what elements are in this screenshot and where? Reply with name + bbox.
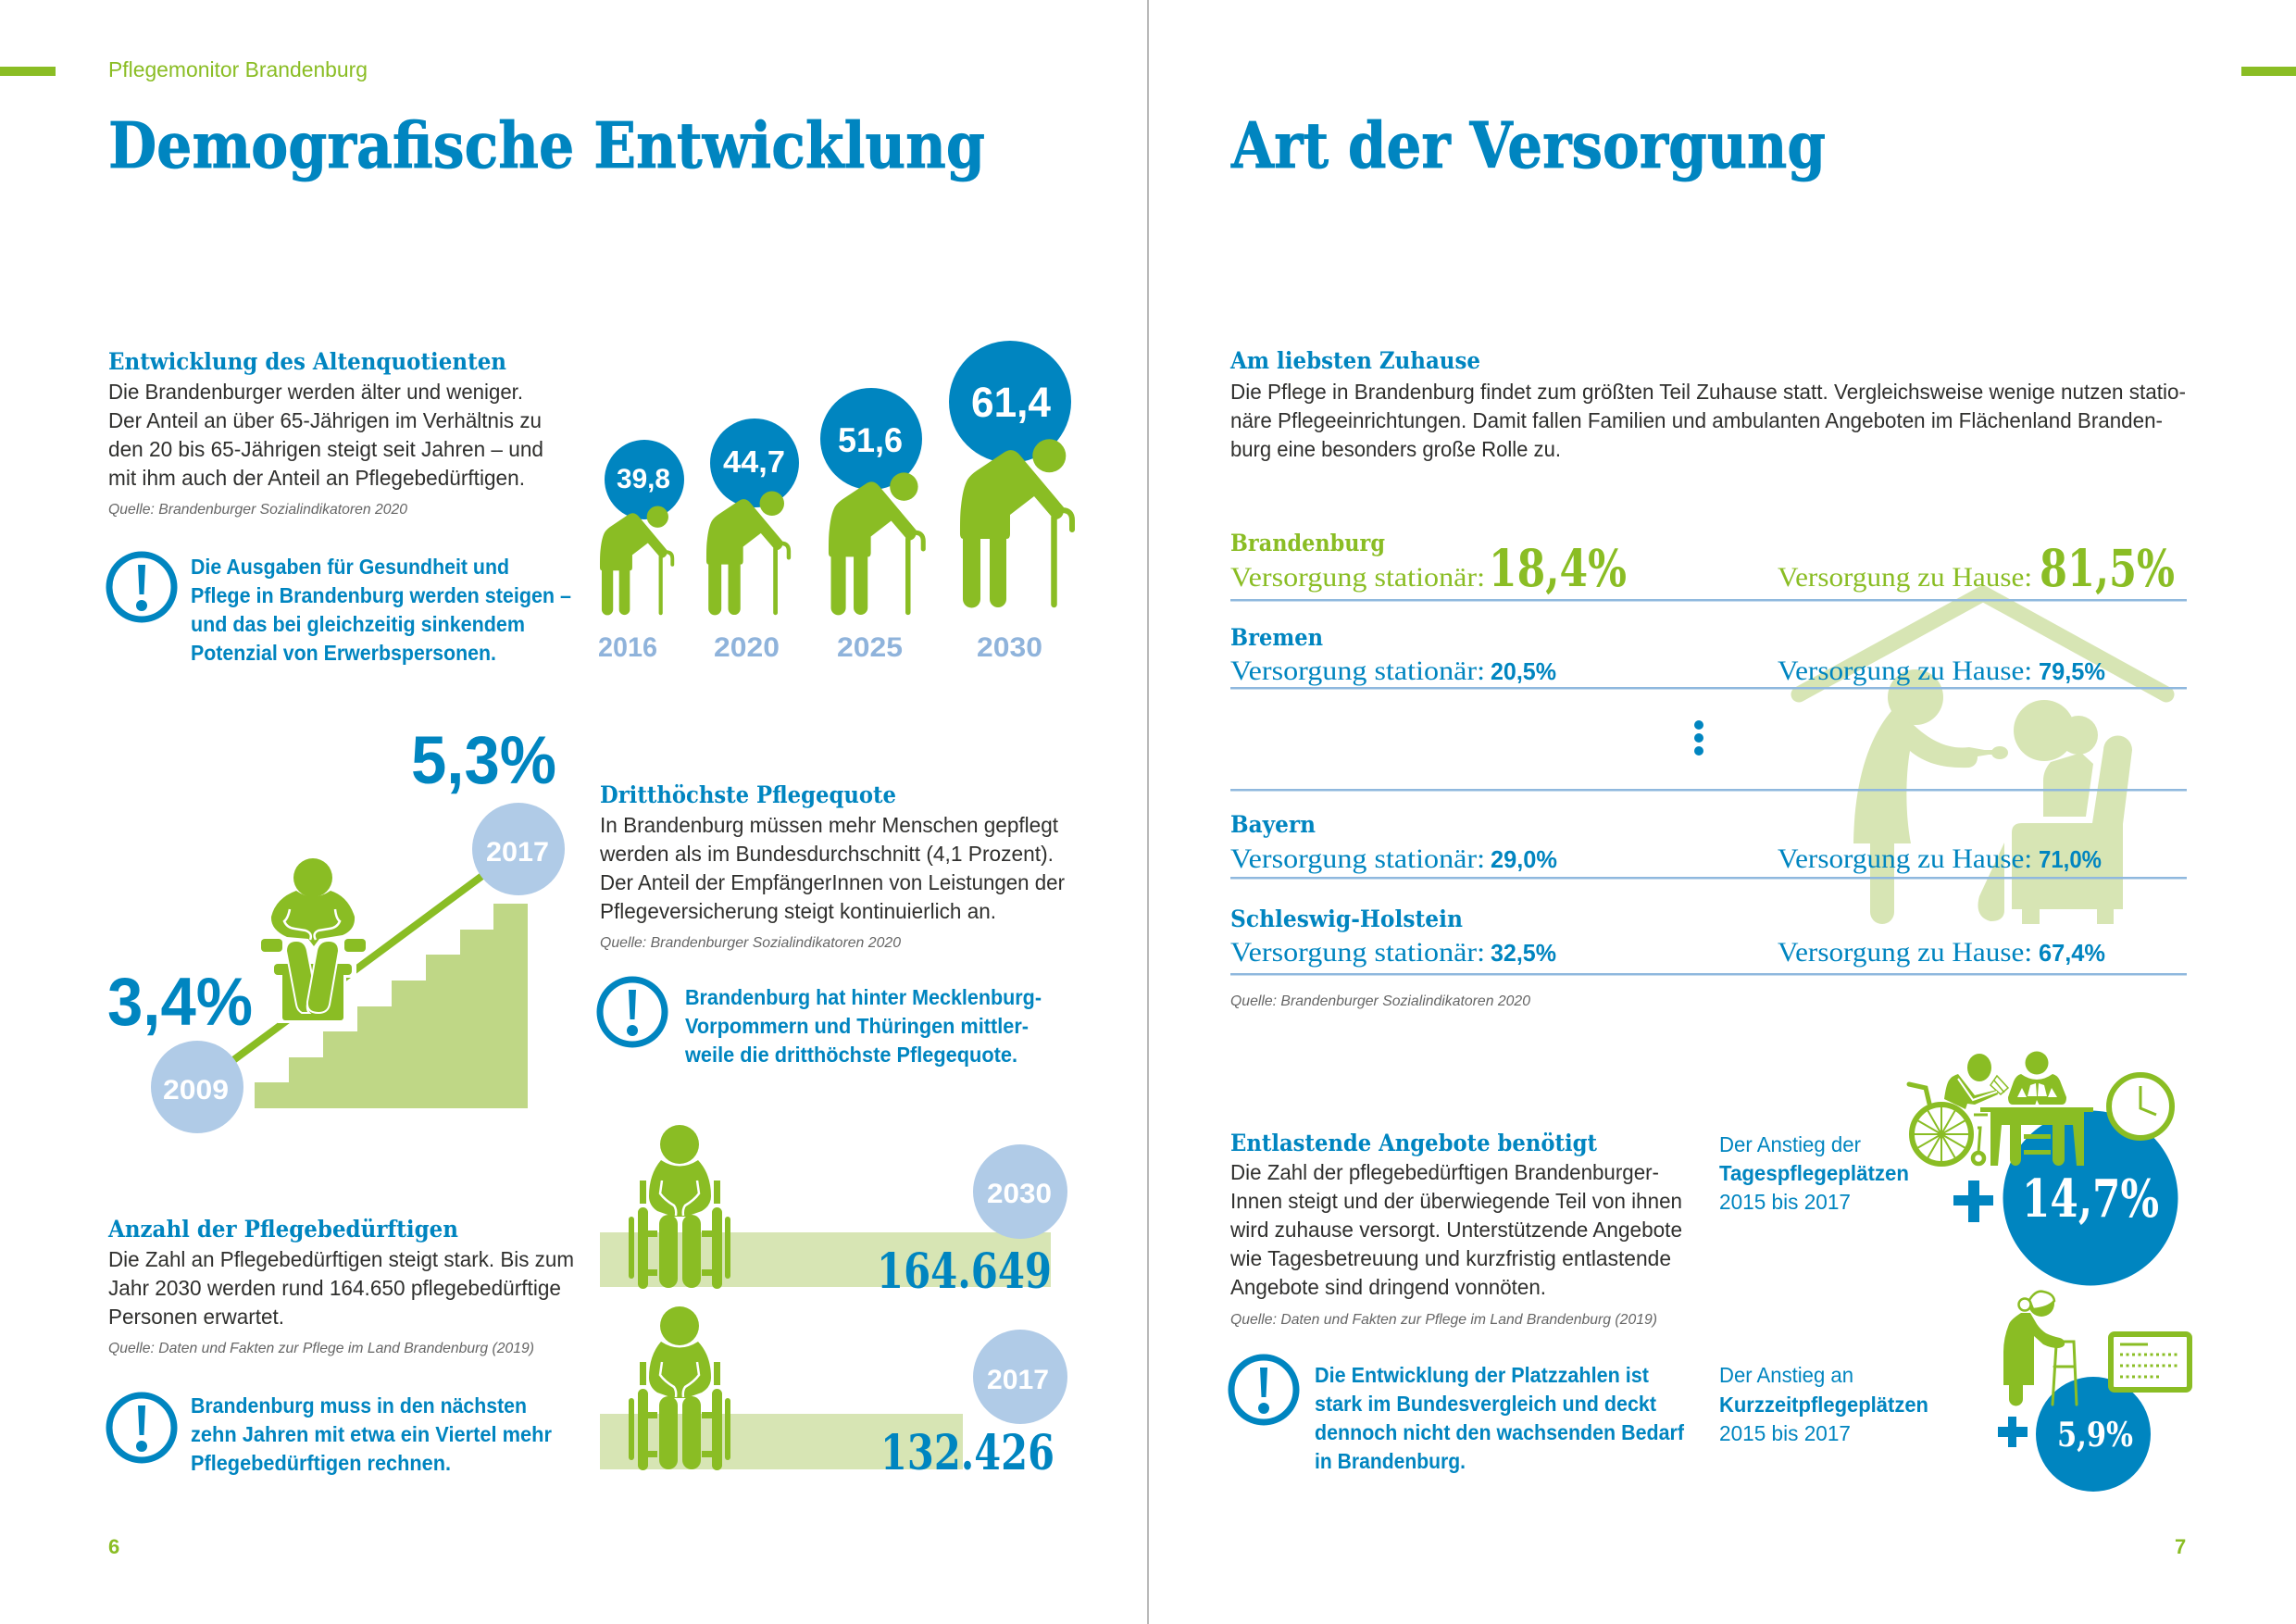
text block: Anzahl der Pflegebedürftigen: Quelle: Daten und Fakten zur Pflege im Land Brandenburg (2019)	[108, 1341, 534, 1356]
text block: Entwicklung des Altenquotienten: den 20 bis 65-Jährigen steigt seit Jahren – und	[108, 437, 543, 461]
row: Schleswig-Holstein	[1230, 906, 2105, 968]
text block: Anzahl der Pflegebedürftigen: Personen erwartet.	[108, 1305, 284, 1329]
chart: Altenquotient 2030: 61,4	[971, 379, 1051, 426]
chart: Pflegequote Treppe	[107, 723, 565, 1133]
value 3,4%: 3,4%	[107, 965, 253, 1040]
circle 2009: 2009	[163, 1075, 229, 1106]
icon: plus small	[1998, 1417, 2028, 1447]
callout: Ausgaben: Die Ausgaben für Gesundheit und	[191, 555, 509, 579]
callout: dritthöchste Pflegequote: Brandenburg hat hinter Mecklenburg-	[685, 985, 1042, 1009]
callout: Platzzahlen: stark im Bundesvergleich und deckt	[1315, 1392, 1656, 1416]
text block: Entlastende Angebote benötigt: Quelle: Daten und Fakten zur Pflege im Land Brandenburg (2019)	[1230, 1312, 1657, 1328]
row: Bremen: Versorgung stationär:	[1230, 656, 1485, 686]
text block: Anzahl der Pflegebedürftigen: Jahr 2030 werden rund 164.650 pflegebedürftige	[108, 1276, 561, 1300]
text block: Entwicklung des Altenquotienten: Entwicklung des Altenquotienten	[108, 348, 506, 375]
row: Brandenburg	[1230, 530, 2175, 598]
callout: dritthöchste Pflegequote	[600, 980, 1042, 1067]
text block: Entlastende Angebote benötigt: Angebote sind dringend vonnöten.	[1230, 1275, 1546, 1299]
text: Kurzzeitpflegeplätze: 2015 bis 2017	[1719, 1421, 1851, 1445]
callout: Ausgaben: und das bei gleichzeitig sinkendem	[191, 612, 525, 636]
icon: plan board	[2111, 1334, 2190, 1390]
text block: Entlastende Angebote benötigt	[1229, 1130, 1682, 1328]
table: Versorgung nach Ländern	[1230, 530, 2187, 976]
text: Kurzzeitpflegeplätze	[1719, 1363, 1928, 1445]
callout: dritthöchste Pflegequote: Vorpommern und Thüringen mittler-	[685, 1014, 1029, 1038]
text block: Dritthöchste Pflegequote: werden als im Bundesdurchschnitt (4,1 Prozent).	[599, 842, 1054, 866]
callout: Platzzahlen: in Brandenburg.	[1315, 1449, 1466, 1473]
text block: Dritthöchste Pflegequote: In Brandenburg müssen mehr Menschen gepflegt	[600, 813, 1059, 837]
bar chart: 2017	[600, 1306, 1067, 1481]
row: Schleswig-Holstein: Versorgung zu Hause:	[1778, 937, 2032, 968]
text: Kurzzeitpflegeplätze: Der Anstieg an	[1719, 1363, 1853, 1387]
row: Bremen: 20,5%	[1491, 657, 1556, 685]
callout: Ausgaben	[109, 555, 571, 665]
text block: Am liebsten Zuhause: burg eine besonders große Rolle zu.	[1230, 437, 1561, 461]
icon: wheelchair card game	[1909, 1052, 2093, 1166]
icon: clock	[2109, 1075, 2172, 1138]
icon: woman with walker	[2003, 1291, 2077, 1405]
chart: Altenquotient 2016	[598, 440, 684, 663]
text block: Am liebsten Zuhause: näre Pflegeeinrichtungen. Damit fallen Familien und ambulanten Angeboten im Flächenland Branden-	[1230, 408, 2163, 432]
value 5,3%: 5,3%	[411, 723, 556, 798]
circle 2017: 2017	[486, 837, 549, 868]
text block: Entlastende Angebote benötigt: wird zuhause versorgt. Unterstützende Angebote	[1229, 1218, 1682, 1242]
text block: Anzahl der Pflegebedürftigen	[107, 1216, 574, 1356]
text block: Dritthöchste Pflegequote: Pflegeversicherung steigt kontinuierlich an.	[600, 899, 996, 923]
text block: Entwicklung des Altenquotienten: Quelle: Brandenburger Sozialindikatoren 2020	[108, 502, 407, 518]
top mark right	[2241, 67, 2296, 76]
text block: Entlastende Angebote benötigt: Innen steigt und der überwiegende Teil von ihnen	[1230, 1189, 1682, 1213]
text block: Anzahl der Pflegebedürftigen: Anzahl der Pflegebedürftigen	[107, 1216, 458, 1243]
stat circle: 14,7%	[2003, 1111, 2177, 1285]
text block: Entlastende Angebote benötigt: wie Tagesbetreuung und kurzfristig entlastende	[1229, 1246, 1671, 1270]
text: Tagespflegeplätze: Tagespflegeplätzen	[1719, 1161, 1909, 1185]
bar chart: 2030: 164.649	[877, 1243, 1052, 1300]
text block: Am liebsten Zuhause: Die Pflege in Brandenburg findet zum größten Teil Zuhause statt. Vergleichsweise wenige nutzen statio-	[1230, 380, 2186, 404]
text block: Dritthöchste Pflegequote: Der Anteil der EmpfängerInnen von Leistungen der	[600, 870, 1065, 894]
row: Bayern: Versorgung zu Hause:	[1778, 843, 2032, 874]
text block: Anzahl der Pflegebedürftigen: Die Zahl an Pflegebedürftigen steigt stark. Bis zum	[108, 1247, 574, 1271]
row: Bremen: 79,5%	[2039, 657, 2105, 685]
callout: dritthöchste Pflegequote: weile die dritthöchste Pflegequote.	[684, 1043, 1017, 1067]
text block: Dritthöchste Pflegequote	[599, 781, 1065, 951]
chart: Altenquotient 2025: 2025	[837, 632, 903, 663]
circle 2009	[151, 1041, 243, 1133]
row: Bayern: Versorgung stationär:	[1230, 843, 1485, 874]
row: Brandenburg: 81,5%	[2040, 538, 2175, 598]
title: Demografische Entwicklung: Demografische Entwicklung	[108, 109, 985, 183]
title: Art der Versorgung: Art der Versorgung	[1230, 109, 1826, 183]
row: Bayern	[1230, 811, 2102, 874]
row: Brandenburg: Versorgung zu Hause:	[1778, 562, 2032, 593]
text block: Entlastende Angebote benötigt: Die Zahl der pflegebedürftigen Brandenburger-	[1230, 1160, 1659, 1184]
text: Tagespflegeplätze: 2015 bis 2017	[1719, 1190, 1851, 1214]
row: Bayern: 29,0%	[1491, 845, 1557, 873]
text block: Dritthöchste Pflegequote: Quelle: Brandenburger Sozialindikatoren 2020	[600, 935, 901, 951]
chart: Altenquotient 2016: 39,8	[617, 464, 670, 494]
stat circle: 14,7%: 14,7%	[2022, 1168, 2159, 1230]
stat circle: 5,9%: 5,9%	[2057, 1416, 2133, 1455]
bar chart: 2017: 132.426	[880, 1425, 1054, 1481]
row: Brandenburg: Brandenburg	[1230, 530, 1385, 556]
callout: Platzzahlen	[1231, 1357, 1684, 1473]
circle 2017	[472, 803, 565, 895]
chart: Altenquotient 2025: 51,6	[838, 421, 903, 459]
icon: ellipsis dots	[1694, 720, 1703, 756]
callout: Viertel mehr	[109, 1393, 552, 1475]
row: Brandenburg: 18,4%	[1489, 538, 1627, 598]
text block: Dritthöchste Pflegequote: Dritthöchste Pflegequote	[600, 781, 896, 808]
chart: Altenquotient 2030: 2030	[977, 632, 1042, 663]
text: Tagespflegeplätze: Der Anstieg der	[1719, 1132, 1861, 1156]
bar chart: 2030	[600, 1125, 1067, 1300]
row: Bayern: Bayern	[1230, 811, 1316, 838]
row: Schleswig-Holstein: 67,4%	[2039, 939, 2105, 967]
callout: Viertel mehr: Pflegebedürftigen rechnen.	[191, 1451, 451, 1475]
running header: Pflegemonitor Brandenburg	[108, 57, 368, 81]
callout: Ausgaben: Pflege in Brandenburg werden steigen –	[191, 583, 571, 607]
bar chart: 2030: 2030	[987, 1179, 1052, 1209]
chart: Altenquotient 2020: 2020	[714, 632, 780, 663]
text block: Entwicklung des Altenquotienten: Der Anteil an über 65-Jährigen im Verhältnis zu	[108, 408, 542, 432]
callout: Platzzahlen: Die Entwicklung der Platzzahlen ist	[1315, 1363, 1649, 1387]
stat circle: 5,9%	[2036, 1377, 2151, 1492]
callout: Ausgaben: Potenzial von Erwerbspersonen.	[191, 641, 496, 665]
row: Bremen	[1230, 624, 2105, 686]
callout: Viertel mehr: Brandenburg muss in den nächsten	[191, 1393, 527, 1418]
text block: Entlastende Angebote benötigt: Entlastende Angebote benötigt	[1230, 1130, 1597, 1156]
page divider	[1147, 0, 1149, 1624]
text block: Entwicklung des Altenquotienten: mit ihm auch der Anteil an Pflegebedürftigen.	[108, 466, 525, 490]
icon: plus large	[1953, 1181, 1993, 1222]
callout: Viertel mehr: zehn Jahren mit etwa ein Viertel mehr	[191, 1422, 552, 1446]
row: Schleswig-Holstein: 32,5%	[1491, 939, 1556, 967]
text block: Entwicklung des Altenquotienten: Die Brandenburger werden älter und weniger.	[108, 380, 523, 404]
page number 6: 6	[108, 1535, 119, 1558]
source note: Quelle: Brandenburger Sozialindikatoren 2020	[1230, 993, 1530, 1009]
row: Bayern: 71,0%	[2039, 845, 2102, 873]
arrow: rising line	[197, 849, 518, 1087]
page number 7: 7	[2175, 1535, 2186, 1558]
chart: Altenquotient 2020	[706, 418, 799, 663]
top mark left	[0, 67, 56, 76]
chart: Altenquotient 2016: 2016	[598, 632, 657, 663]
text block: Entwicklung des Altenquotienten	[108, 348, 543, 518]
row: Schleswig-Holstein: Schleswig-Holstein	[1230, 906, 1463, 932]
text: Tagespflegeplätze	[1719, 1132, 1909, 1214]
icon: person on stairlift	[261, 858, 366, 1023]
row: Brandenburg: Versorgung stationär:	[1230, 562, 1485, 593]
text block: Am liebsten Zuhause	[1229, 347, 2186, 461]
stairs	[255, 904, 528, 1108]
text block: Am liebsten Zuhause: Am liebsten Zuhause	[1229, 347, 1480, 374]
chart: Altenquotient 2025	[820, 388, 923, 663]
row: Bremen: Versorgung zu Hause:	[1778, 656, 2032, 686]
callout: Platzzahlen: dennoch nicht den wachsenden Bedarf	[1315, 1420, 1684, 1444]
text: Kurzzeitpflegeplätze: Kurzzeitpflegeplätzen	[1719, 1393, 1928, 1417]
icon: care at home watermark	[1799, 593, 2166, 924]
chart: Altenquotient 2030	[949, 341, 1072, 663]
bar chart: 2017: 2017	[987, 1365, 1049, 1395]
chart: Altenquotient 2020: 44,7	[723, 444, 785, 479]
row: Schleswig-Holstein: Versorgung stationär:	[1230, 937, 1485, 968]
row: Bremen: Bremen	[1230, 624, 1323, 651]
